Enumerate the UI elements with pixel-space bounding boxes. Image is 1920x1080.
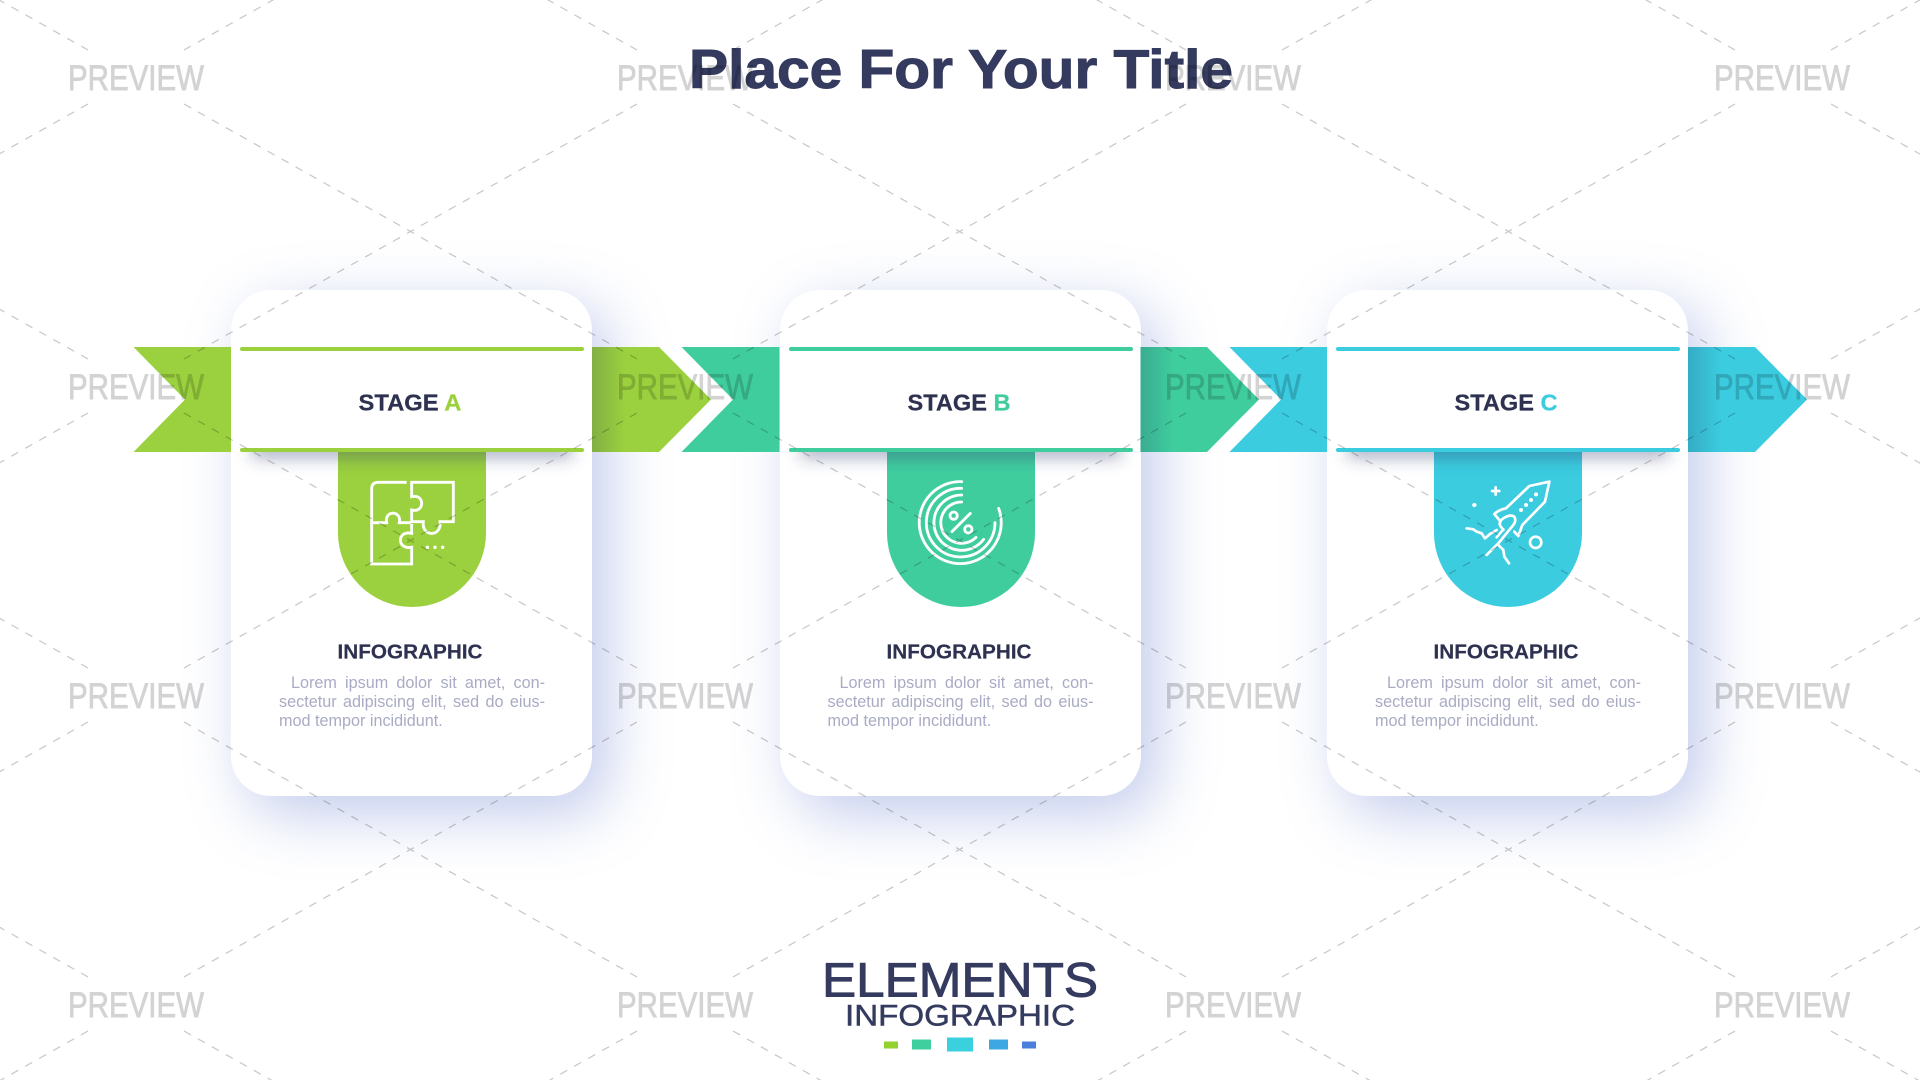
arrow: stage C tail bbox=[1230, 347, 1327, 452]
band: bottom rule bbox=[788, 448, 1132, 452]
watermark: preview grid: PREVIEW bbox=[1165, 59, 1301, 98]
panel: stage A card bbox=[231, 290, 592, 796]
watermark: preview grid: PREVIEW bbox=[68, 986, 204, 1025]
band: top rule bbox=[788, 347, 1132, 351]
band: top rule bbox=[1336, 347, 1680, 351]
heading: INFOGRAPHIC: INFOGRAPHIC bbox=[886, 642, 1031, 664]
arrow: stage A head bbox=[592, 347, 711, 452]
heading: STAGE A: STAGE A bbox=[358, 390, 462, 416]
watermark: preview grid: PREVIEW bbox=[617, 59, 753, 98]
tab: stage A icon holder bbox=[338, 452, 486, 607]
band: bottom rule bbox=[240, 448, 584, 452]
watermark: preview grid: PREVIEW bbox=[1165, 986, 1301, 1025]
icon: percent dial bbox=[919, 482, 1001, 564]
arrow: stage A tail bbox=[134, 347, 231, 452]
watermark: preview grid: PREVIEW bbox=[617, 368, 753, 407]
panel: stage C card bbox=[1327, 290, 1688, 796]
watermark: preview grid: PREVIEW bbox=[1165, 677, 1301, 716]
watermark: preview grid: PREVIEW bbox=[1714, 368, 1850, 407]
text block: description: sectetur adipiscing elit, sed do eius- bbox=[1375, 693, 1641, 711]
heading: STAGE C: STAGE C bbox=[1454, 390, 1558, 416]
band shadow bbox=[1348, 442, 1668, 458]
text block: description: mod tempor incididunt. bbox=[279, 712, 443, 730]
text block: description bbox=[279, 674, 545, 730]
tab: stage B icon holder bbox=[886, 452, 1034, 607]
tab: stage C icon holder bbox=[1434, 452, 1582, 607]
heading: INFOGRAPHIC: INFOGRAPHIC bbox=[338, 642, 482, 664]
watermark: preview grid: PREVIEW bbox=[1165, 368, 1301, 407]
watermark: preview grid: PREVIEW bbox=[68, 677, 204, 716]
heading: INFOGRAPHIC: INFOGRAPHIC bbox=[1434, 642, 1578, 664]
panel: stage B card bbox=[780, 290, 1140, 796]
arrow: stage B tail bbox=[682, 347, 780, 452]
watermark: preview grid: PREVIEW bbox=[1714, 677, 1850, 716]
logo: elements infographic bbox=[822, 954, 1098, 1052]
arrow: stage B head bbox=[1140, 347, 1259, 452]
text block: description: mod tempor incididunt. bbox=[1375, 712, 1539, 730]
text block: description: mod tempor incididunt. bbox=[828, 712, 991, 730]
arrow: stage C head bbox=[1688, 347, 1807, 452]
band shadow bbox=[800, 442, 1120, 458]
icon: puzzle bbox=[372, 482, 453, 564]
text block: description: Lorem ipsum dolor sit amet, con- bbox=[291, 674, 545, 692]
text block: description: Lorem ipsum dolor sit amet, con- bbox=[1387, 674, 1641, 692]
logo swatches bbox=[884, 1038, 1036, 1052]
icon: rocket bbox=[1467, 482, 1549, 563]
watermark: preview grid: PREVIEW bbox=[68, 368, 204, 407]
watermark: preview grid: PREVIEW bbox=[68, 59, 204, 98]
watermark: preview grid: PREVIEW bbox=[617, 677, 753, 716]
text block: description: sectetur adipiscing elit, sed do eius- bbox=[279, 693, 545, 711]
logo word: ELEMENTS: ELEMENTS bbox=[822, 954, 1098, 1008]
watermark: preview grid: PREVIEW bbox=[1714, 59, 1850, 98]
text block: description: sectetur adipiscing elit, sed do eius- bbox=[828, 693, 1094, 711]
title: Place For Your Title bbox=[689, 38, 1233, 100]
text block: description bbox=[828, 674, 1094, 730]
band shadow bbox=[252, 442, 572, 458]
band: top rule bbox=[240, 347, 584, 351]
watermark: preview grid: PREVIEW bbox=[1714, 986, 1850, 1025]
text block: description: Lorem ipsum dolor sit amet, con- bbox=[840, 674, 1094, 692]
band: bottom rule bbox=[1336, 448, 1680, 452]
watermark: preview grid: PREVIEW bbox=[617, 986, 753, 1025]
logo word: INFOGRAPHIC: INFOGRAPHIC bbox=[845, 1000, 1075, 1032]
text block: description bbox=[1375, 674, 1641, 730]
heading: STAGE B: STAGE B bbox=[907, 390, 1010, 416]
